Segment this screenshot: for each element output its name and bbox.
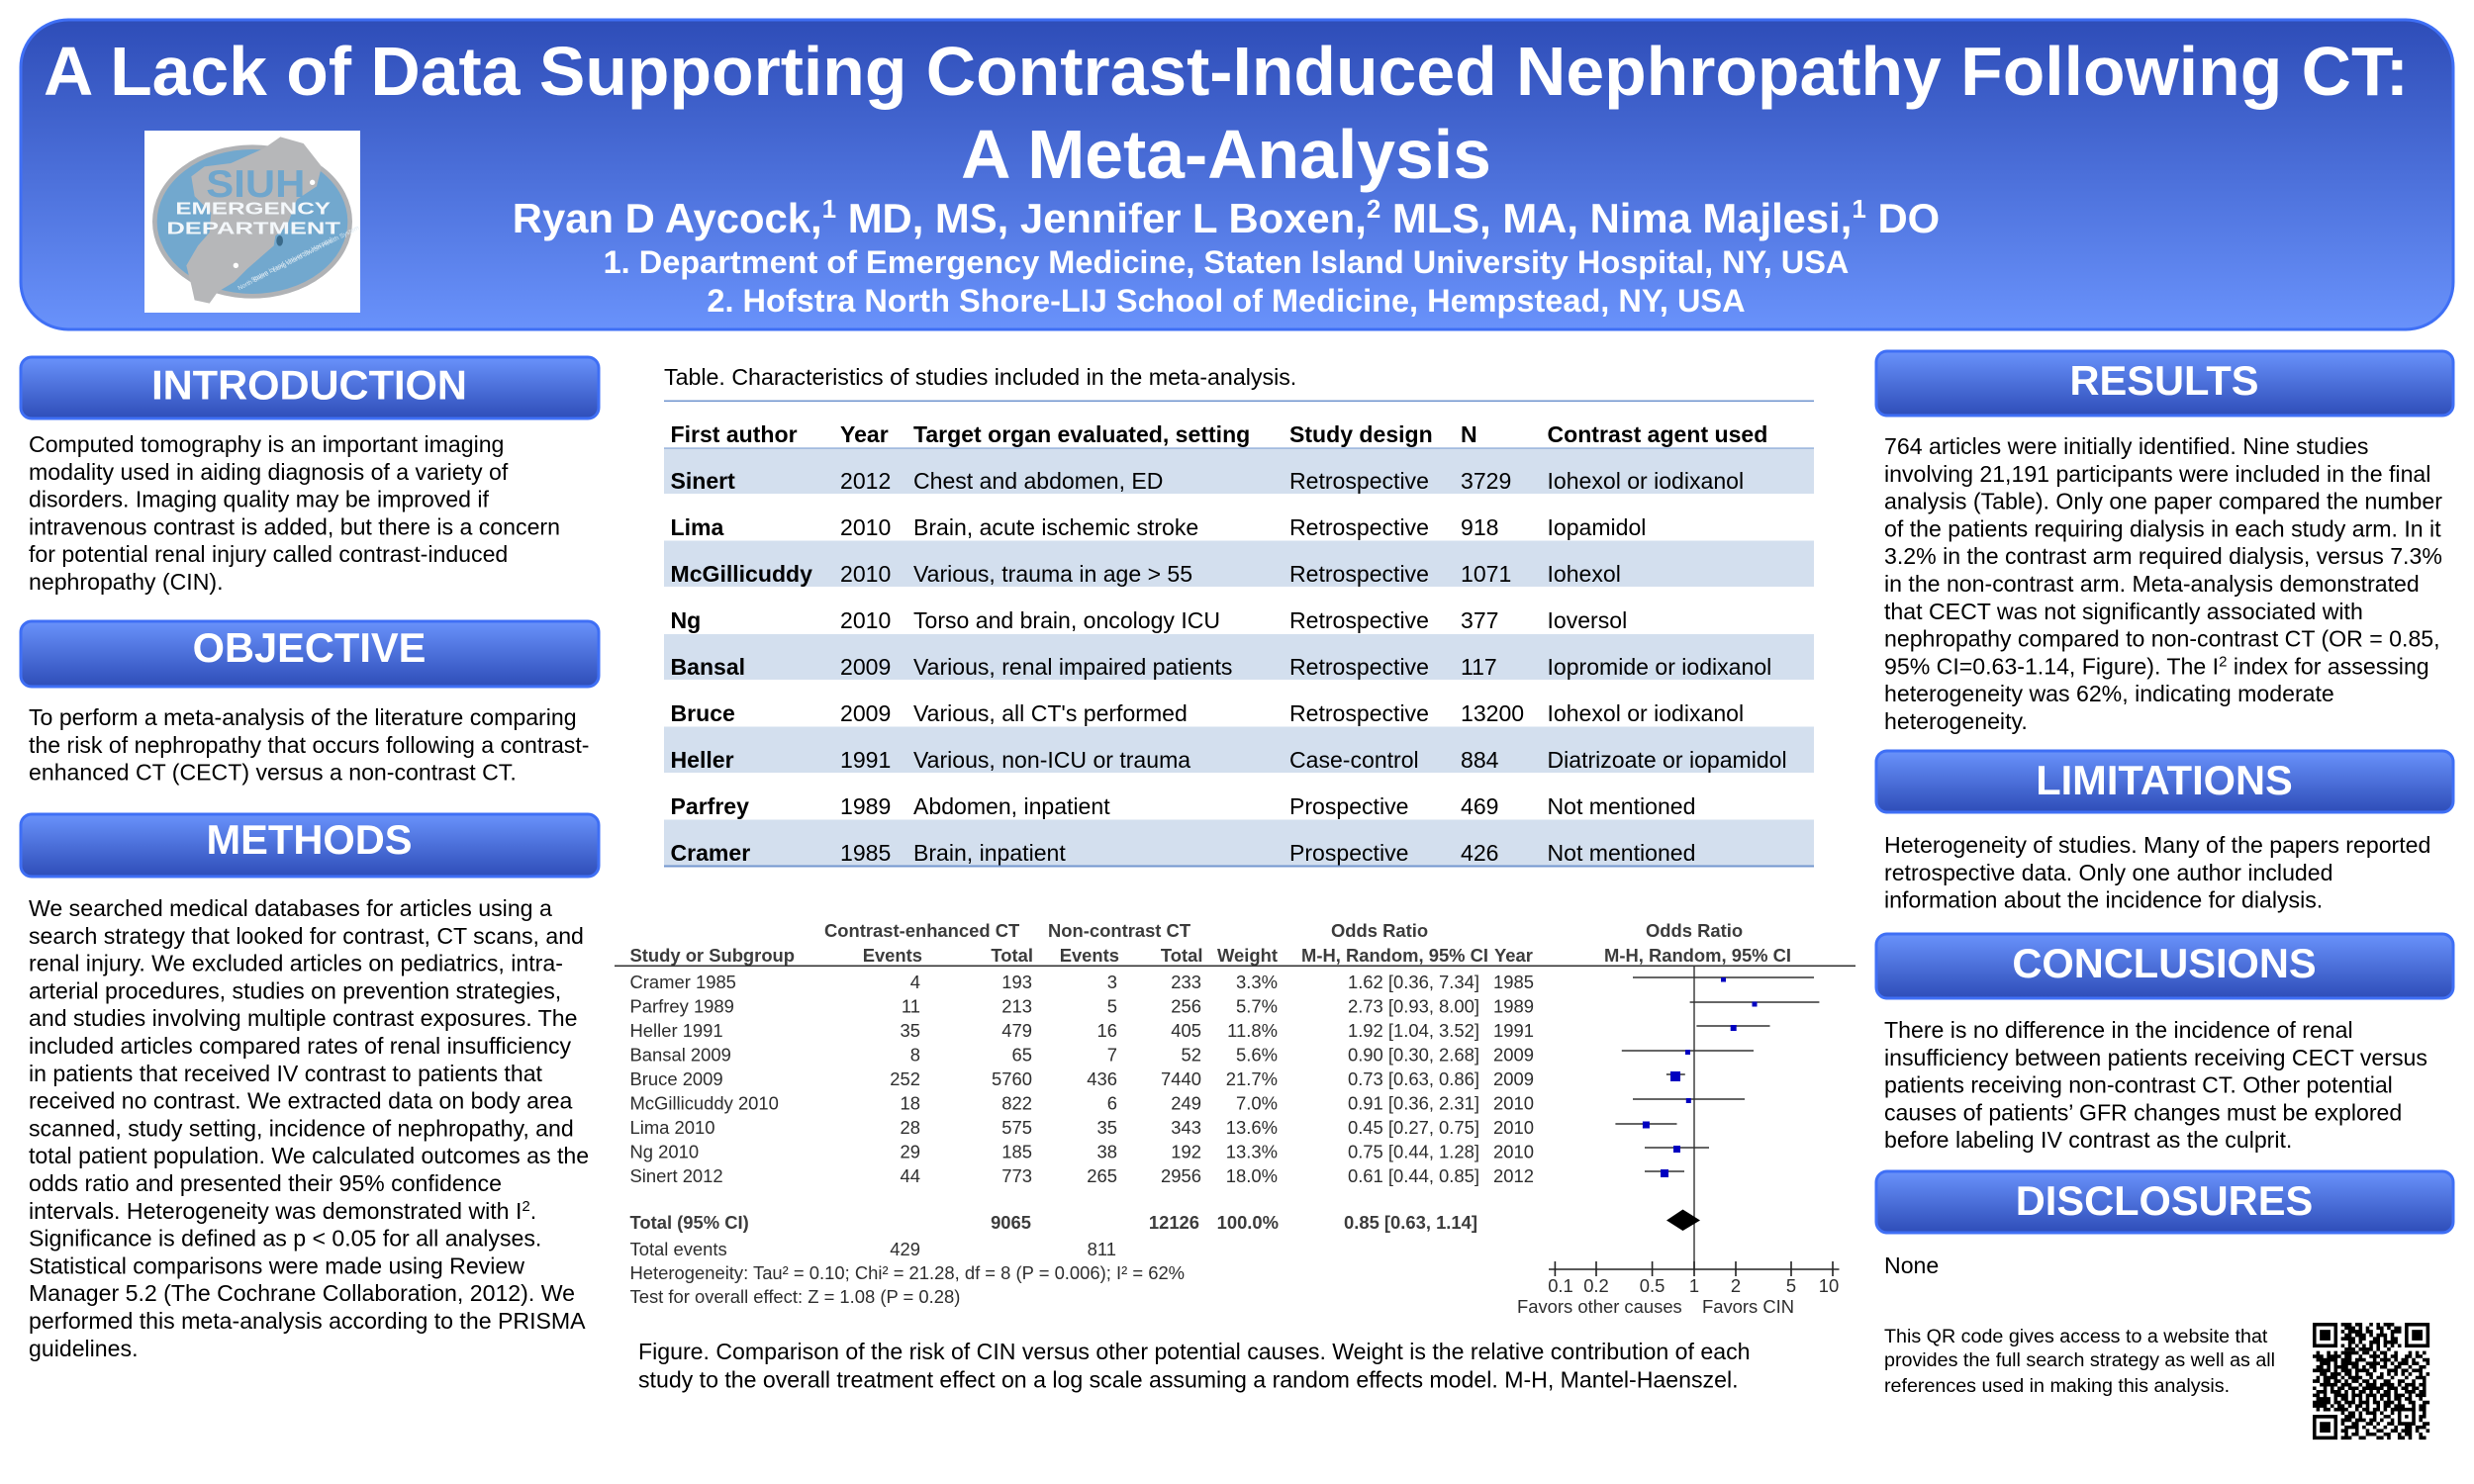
text: objective body: To perform a meta-analysis of the literature comparing — [29, 704, 577, 730]
text: results body: nephropathy compared to non-contrast CT (OR = 0.85, — [1884, 626, 2440, 652]
row: Parfrey: Abdomen, inpatient — [913, 793, 1110, 819]
row: Sinert: Chest and abdomen, ED — [913, 468, 1163, 494]
text: methods body: Manager 5.2 (The Cochrane Collaboration, 2012). We — [29, 1280, 575, 1306]
study rows: Parfrey 1989 — [629, 995, 734, 1017]
row: Heller: 884 — [1461, 747, 1499, 773]
logo: SIUH Emergency Department — [144, 131, 360, 313]
row: Ng: Ng — [671, 607, 701, 633]
text: methods body: intervals. Heterogeneity was demonstrated with I — [29, 1198, 522, 1224]
row: Parfrey: 469 — [1461, 793, 1498, 819]
row: Sinert: 3729 — [1461, 468, 1511, 494]
forest plot column headers: Events — [1060, 945, 1119, 966]
forest plot column headers: Events — [863, 945, 922, 966]
study rows: Ng 2010 — [629, 1142, 699, 1161]
forest plot column headers: Total — [991, 945, 1033, 966]
study rows: 192 — [1171, 1142, 1201, 1161]
panel: disclosures — [1876, 1171, 2453, 1438]
text: results body: index for assessing — [2227, 653, 2429, 679]
panel: conclusions — [1876, 934, 2453, 1153]
study rows: 265 — [1087, 1165, 1117, 1186]
study rows: 18.0% — [1226, 1165, 1278, 1186]
panel: results — [1876, 351, 2453, 734]
axis labels: 0.5 — [1640, 1275, 1665, 1296]
heading: disclosures: DISCLOSURES — [2016, 1177, 2313, 1224]
study rows: 0.45 [0.27, 0.75] — [1348, 1117, 1479, 1138]
text: QR code note: references used in making this analysis. — [1884, 1375, 2230, 1397]
study rows: 13.6% — [1226, 1117, 1278, 1138]
text: introduction body: intravenous contrast is added, but there is a concern — [29, 513, 560, 539]
text: results body: 764 articles were initially identified. Nine studies — [1884, 433, 2368, 459]
row: McGillicuddy: 2010 — [840, 561, 891, 587]
chart: forest plot — [1517, 966, 1839, 1317]
text: results body: 95% CI=0.63-1.14, Figure). The I — [1884, 653, 2219, 679]
text: introduction body: Computed tomography is an important imaging — [29, 431, 504, 457]
row: Lima: Brain, acute ischemic stroke — [913, 514, 1198, 540]
table header row: Year — [840, 421, 889, 447]
study rows — [629, 972, 1534, 1186]
study rows: Sinert 2012 — [629, 1165, 723, 1186]
forest plot column headers — [629, 920, 1791, 966]
text: methods body: odds ratio and presented their 95% confidence — [29, 1170, 502, 1196]
row: Ng: Ioversol — [1548, 607, 1627, 633]
row: Sinert: Iohexol or iodixanol — [1548, 468, 1744, 494]
statistics notes: Test for overall effect: Z = 1.08 (P = 0.28) — [629, 1286, 960, 1307]
text: conclusions body: There is no difference in the incidence of renal — [1884, 1017, 2353, 1043]
row: McGillicuddy: Retrospective — [1289, 561, 1429, 587]
axis labels: 1 — [1689, 1275, 1699, 1296]
study rows: 3.3% — [1236, 972, 1278, 992]
study rows: 13.3% — [1226, 1142, 1278, 1161]
study rows: 405 — [1171, 1020, 1201, 1041]
row: McGillicuddy: Various, trauma in age > 55 — [913, 561, 1192, 587]
study rows: 2009 — [1493, 1068, 1534, 1089]
forest plot column headers: M-H, Random, 95% CI — [1301, 945, 1488, 966]
study rows: 18 — [901, 1092, 920, 1114]
study rows: 2012 — [1493, 1165, 1534, 1186]
text: limitations body: retrospective data. Only one author included — [1884, 860, 2332, 885]
row: Bruce: Retrospective — [1289, 700, 1429, 726]
text: methods body: Statistical comparisons were made using Review — [29, 1252, 524, 1278]
row: Heller: Heller — [671, 747, 734, 773]
affiliations: 2. Hofstra North Shore-LIJ School of Medicine, Hempstead, NY, USA — [707, 283, 1746, 319]
study rows: Bruce 2009 — [629, 1068, 723, 1089]
forest plot column headers: Year — [1494, 945, 1533, 966]
text: results body: 3.2% in the contrast arm required dialysis, versus 7.3% — [1884, 543, 2442, 569]
totals row: 0.85 [0.63, 1.14] — [1344, 1212, 1477, 1233]
row: Heller: Case-control — [1289, 747, 1419, 773]
text: introduction body: for potential renal injury called contrast-induced — [29, 541, 508, 567]
title: A Lack of Data Supporting Contrast-Induced Nephropathy Following CT: — [44, 33, 2409, 110]
study rows: 773 — [1001, 1165, 1032, 1186]
study rows: 343 — [1171, 1117, 1201, 1138]
study rows: 52 — [1182, 1045, 1201, 1065]
statistics notes: Total events — [629, 1239, 727, 1259]
row: Ng — [671, 607, 1627, 633]
text: results body: of the patients requiring dialysis in each study arm. In it — [1884, 515, 2441, 541]
authors: Ryan D Aycock, — [513, 195, 822, 241]
study rows: 5 — [1107, 995, 1117, 1017]
row: Lima: 918 — [1461, 514, 1498, 540]
logo: SIUH Emergency Department: EMERGENCY — [175, 199, 331, 219]
panel: forest plot figure — [615, 920, 1856, 1393]
study rows: 2010 — [1493, 1092, 1534, 1114]
row: Bruce: Various, all CT's performed — [913, 700, 1188, 726]
study rows: 29 — [901, 1142, 920, 1161]
heading: methods — [21, 814, 599, 877]
row: Cramer: 1985 — [840, 840, 891, 866]
totals row: 100.0% — [1217, 1212, 1279, 1233]
text: objective body: the risk of nephropathy that occurs following a contrast- — [29, 732, 589, 758]
title: A Meta-Analysis — [961, 116, 1491, 193]
table caption: Table. Characteristics of studies included in the meta-analysis. — [664, 364, 1296, 390]
text: methods body: total patient population. We calculated outcomes as the — [29, 1143, 589, 1168]
statistics notes: Heterogeneity: Tau² = 0.10; Chi² = 21.28, df = 8 (P = 0.006); I² = 62% — [629, 1262, 1185, 1283]
confidence intervals — [1615, 977, 1819, 1171]
figure caption: Figure. Comparison of the risk of CIN versus other potential causes. Weight is the relative contribution of each — [638, 1339, 1750, 1364]
study rows: 213 — [1001, 995, 1032, 1017]
row: Sinert: Sinert — [671, 468, 735, 494]
statistics notes: 429 — [890, 1239, 920, 1259]
study rows: 256 — [1171, 995, 1201, 1017]
row: Lima: Retrospective — [1289, 514, 1429, 540]
axis — [1549, 1261, 1839, 1276]
heading: disclosures — [1876, 1171, 2453, 1233]
panel: study characteristics table — [664, 364, 1814, 867]
row: Sinert: Retrospective — [1289, 468, 1429, 494]
text: limitations body: Heterogeneity of studies. Many of the papers reported — [1884, 832, 2430, 858]
title — [44, 33, 2409, 193]
row: Bruce: 13200 — [1461, 700, 1524, 726]
study rows: 1.62 [0.36, 7.34] — [1348, 972, 1479, 992]
study rows: 1989 — [1493, 995, 1534, 1017]
favors labels: Favors other causes — [1517, 1296, 1682, 1317]
row: Heller: 1991 — [840, 747, 891, 773]
study rows: 28 — [901, 1117, 920, 1138]
text: conclusions body: insufficiency between patients receiving CECT versus — [1884, 1045, 2427, 1070]
row: Sinert: 2012 — [840, 468, 891, 494]
study rows: 44 — [901, 1165, 920, 1186]
heading: introduction — [21, 357, 599, 418]
forest plot column headers: Odds Ratio — [1331, 920, 1428, 941]
logo: SIUH Emergency Department: Staten Island University Hospital — [250, 236, 333, 284]
forest plot column headers: Odds Ratio — [1646, 920, 1743, 941]
text: results body: heterogeneity. — [1884, 708, 2028, 734]
icon: QR code — [2313, 1325, 2429, 1438]
text: methods body: . — [530, 1198, 536, 1224]
statistics notes: 811 — [1088, 1239, 1116, 1259]
study rows: 1991 — [1493, 1020, 1534, 1041]
study rows: 38 — [1097, 1142, 1117, 1161]
row: Bansal: 117 — [1461, 654, 1497, 680]
study rows: 5.7% — [1236, 995, 1278, 1017]
study rows: 35 — [1097, 1117, 1117, 1138]
study rows: 0.61 [0.44, 0.85] — [1348, 1165, 1479, 1186]
row: McGillicuddy: 1071 — [1461, 561, 1511, 587]
study rows: 7 — [1107, 1045, 1117, 1065]
row: Lima: Iopamidol — [1548, 514, 1646, 540]
study rows: Heller 1991 — [629, 1020, 723, 1041]
header banner — [21, 20, 2453, 329]
forest plot column headers: Weight — [1217, 945, 1278, 966]
authors: MD, MS, Jennifer L Boxen, — [836, 195, 1367, 241]
study rows: 2956 — [1161, 1165, 1201, 1186]
study rows: 0.73 [0.63, 0.86] — [1348, 1068, 1479, 1089]
study rows: 5.6% — [1236, 1045, 1278, 1065]
study effect markers — [1643, 977, 1758, 1177]
authors: 2 — [1367, 194, 1380, 224]
row: Cramer: 426 — [1461, 840, 1498, 866]
study rows: 16 — [1097, 1020, 1117, 1041]
row: McGillicuddy: Iohexol — [1548, 561, 1621, 587]
text: results body: analysis (Table). Only one paper compared the number — [1884, 489, 2442, 514]
text: results body: that CECT was not significantly associated with — [1884, 599, 2363, 624]
heading: results: RESULTS — [2069, 357, 2259, 404]
text: limitations body: information about the incidence for dialysis. — [1884, 887, 2323, 913]
text: methods body: search strategy that looked for contrast, CT scans, and — [29, 923, 584, 949]
study rows: 822 — [1001, 1092, 1032, 1114]
favors labels: Favors CIN — [1702, 1296, 1794, 1317]
logo: SIUH Emergency Department: DEPARTMENT — [166, 219, 340, 238]
row: Parfrey — [671, 793, 1695, 819]
heading: introduction: INTRODUCTION — [151, 362, 467, 408]
axis labels: 0.2 — [1583, 1275, 1609, 1296]
row: Bansal — [664, 634, 1814, 680]
row: Cramer: Brain, inpatient — [913, 840, 1066, 866]
row: Bansal: Bansal — [671, 654, 745, 680]
text: methods body: and studies involving multiple contrast exposures. The — [29, 1005, 578, 1031]
panel: methods — [21, 814, 599, 1361]
row: Bansal: 2009 — [840, 654, 891, 680]
study rows: 575 — [1001, 1117, 1032, 1138]
forest plot column headers: Non-contrast CT — [1048, 920, 1191, 941]
table header row: Contrast agent used — [1548, 421, 1767, 447]
row: Bansal: Retrospective — [1289, 654, 1429, 680]
text: introduction body: nephropathy (CIN). — [29, 569, 224, 595]
row: Parfrey: Prospective — [1289, 793, 1408, 819]
text: methods body: scanned, study setting, incidence of nephropathy, and — [29, 1115, 574, 1141]
authors: 1 — [822, 194, 836, 224]
axis labels: 5 — [1786, 1275, 1796, 1296]
study rows: 1.92 [1.04, 3.52] — [1348, 1020, 1479, 1041]
text: methods body: guidelines. — [29, 1336, 139, 1361]
affiliations: 1. Department of Emergency Medicine, Staten Island University Hospital, NY, USA — [604, 244, 1849, 280]
study rows: 436 — [1087, 1068, 1117, 1089]
row: Heller: Various, non-ICU or trauma — [913, 747, 1190, 773]
row: Parfrey: Parfrey — [671, 793, 749, 819]
heading: methods: METHODS — [207, 816, 412, 863]
study rows: 2010 — [1493, 1142, 1534, 1161]
totals row: 9065 — [991, 1212, 1031, 1233]
text: results body: in the non-contrast arm. Meta-analysis demonstrated — [1884, 571, 2420, 597]
row: Lima: 2010 — [840, 514, 891, 540]
heading: conclusions: CONCLUSIONS — [2012, 940, 2317, 986]
heading: limitations — [1876, 751, 2453, 812]
axis labels: 0.1 — [1548, 1275, 1573, 1296]
text: QR code note: provides the full search strategy as well as all — [1884, 1349, 2275, 1371]
study rows: 479 — [1001, 1020, 1032, 1041]
authors: MLS, MA, Nima Majlesi, — [1380, 195, 1852, 241]
axis labels — [1548, 1275, 1839, 1296]
text: methods body: received no contrast. We extracted data on body area — [29, 1088, 573, 1114]
figure caption: study to the overall treatment effect on a log scale assuming a random effects model. M-H, Mantel-Haenszel. — [638, 1367, 1739, 1393]
row: Parfrey: 1989 — [840, 793, 891, 819]
totals row: 12126 — [1149, 1212, 1199, 1233]
text: results body: 2 — [2219, 653, 2227, 670]
authors: 1 — [1852, 194, 1866, 224]
study rows: 11 — [902, 995, 920, 1017]
heading: results — [1876, 351, 2453, 416]
pooled effect diamond — [1666, 1209, 1700, 1231]
logo: SIUH Emergency Department: North Shore - Long Island Jewish Health System — [237, 225, 360, 292]
panel: introduction — [21, 357, 599, 595]
heading: objective — [21, 621, 599, 687]
axis labels: 10 — [1819, 1275, 1839, 1296]
study rows: 6 — [1107, 1092, 1117, 1114]
row: McGillicuddy: McGillicuddy — [671, 561, 812, 587]
text: methods body: performed this meta-analysis according to the PRISMA — [29, 1308, 586, 1334]
study rows: 0.90 [0.30, 2.68] — [1348, 1045, 1479, 1065]
table header row: Target organ evaluated, setting — [913, 421, 1250, 447]
study rows: 2009 — [1493, 1045, 1534, 1065]
text: conclusions body: before labeling IV contrast as the culprit. — [1884, 1127, 2292, 1153]
forest plot column headers: Contrast-enhanced CT — [824, 920, 1020, 941]
study rows: 185 — [1001, 1142, 1032, 1161]
row: Bruce: Bruce — [671, 700, 735, 726]
row: Bruce: Iohexol or iodixanol — [1548, 700, 1744, 726]
forest plot column headers: Total — [1161, 945, 1203, 966]
study rows: 8 — [910, 1045, 920, 1065]
text: conclusions body: patients receiving non-contrast CT. Other potential — [1884, 1072, 2393, 1098]
row: Sinert — [664, 449, 1814, 494]
row: Parfrey: Not mentioned — [1548, 793, 1695, 819]
row: Ng: 377 — [1461, 607, 1498, 633]
row: Bruce: 2009 — [840, 700, 891, 726]
panel: objective — [21, 621, 599, 786]
text: methods body: in patients that received IV contrast to patients that — [29, 1061, 543, 1086]
study rows: 11.8% — [1227, 1020, 1278, 1041]
study rows: 249 — [1171, 1092, 1201, 1114]
row: Lima — [671, 514, 1646, 540]
table header row: Study design — [1289, 421, 1433, 447]
table header row — [671, 421, 1767, 447]
statistics notes — [629, 1239, 1185, 1307]
row: Heller: Diatrizoate or iopamidol — [1548, 747, 1787, 773]
study rows: Lima 2010 — [629, 1117, 714, 1138]
text: methods body: renal injury. We excluded articles on pediatrics, intra- — [29, 951, 563, 976]
row: McGillicuddy — [664, 540, 1814, 587]
forest plot column headers: Study or Subgroup — [629, 945, 795, 966]
study rows: 0.91 [0.36, 2.31] — [1348, 1092, 1479, 1114]
text: methods body: 2 — [522, 1198, 530, 1215]
text: introduction body: modality used in aiding diagnosis of a variety of — [29, 459, 509, 485]
row: Ng: Retrospective — [1289, 607, 1429, 633]
row: Cramer: Prospective — [1289, 840, 1408, 866]
row: Ng: 2010 — [840, 607, 891, 633]
study rows: 7.0% — [1236, 1092, 1278, 1114]
study rows: 7440 — [1161, 1068, 1201, 1089]
heading: limitations: LIMITATIONS — [2036, 757, 2293, 803]
heading: conclusions — [1876, 934, 2453, 998]
text: objective body: enhanced CT (CECT) versus a non-contrast CT. — [29, 760, 517, 786]
study rows: 3 — [1107, 972, 1117, 992]
row: Cramer: Cramer — [671, 840, 750, 866]
table header row: First author — [671, 421, 798, 447]
study rows: 35 — [901, 1020, 920, 1041]
study rows: McGillicuddy 2010 — [629, 1092, 779, 1114]
affiliations — [604, 244, 1849, 319]
study rows: 233 — [1171, 972, 1201, 992]
text: QR code note: This QR code gives access to a website that — [1884, 1326, 2268, 1347]
study rows: Bansal 2009 — [629, 1045, 731, 1065]
heading: objective: OBJECTIVE — [193, 624, 426, 671]
text: methods body: included articles compared rates of renal insufficiency — [29, 1033, 572, 1059]
logo: SIUH Emergency Department: SIUH — [206, 163, 305, 206]
study rows: 2010 — [1493, 1117, 1534, 1138]
favors labels — [1517, 1296, 1794, 1317]
study rows: 193 — [1001, 972, 1032, 992]
study rows: 0.75 [0.44, 1.28] — [1348, 1142, 1479, 1161]
study rows: 1985 — [1493, 972, 1534, 992]
text: methods body: We searched medical databases for articles using a — [29, 895, 552, 921]
text: methods body: Significance is defined as p < 0.05 for all analyses. — [29, 1226, 541, 1252]
study rows: 2.73 [0.93, 8.00] — [1348, 995, 1479, 1017]
study rows: 21.7% — [1226, 1068, 1278, 1089]
text: disclosures body: None — [1884, 1252, 1939, 1278]
table header row: N — [1461, 421, 1477, 447]
totals row — [629, 1212, 1477, 1233]
text: methods body: arterial procedures, studies on prevention strategies, — [29, 977, 561, 1003]
study rows: 252 — [890, 1068, 920, 1089]
totals row: Total (95% CI) — [629, 1212, 749, 1233]
row: Lima: Lima — [671, 514, 723, 540]
text: results body: involving 21,191 participants were included in the final — [1884, 461, 2430, 487]
authors: DO — [1866, 195, 1940, 241]
row: Bansal: Various, renal impaired patients — [913, 654, 1232, 680]
row: Bruce — [671, 700, 1744, 726]
study rows: Cramer 1985 — [629, 972, 736, 992]
forest plot column headers: M-H, Random, 95% CI — [1604, 945, 1791, 966]
study rows: 4 — [910, 972, 920, 992]
text: introduction body: disorders. Imaging quality may be improved if — [29, 487, 490, 512]
row: Cramer — [664, 819, 1814, 866]
row: Ng: Torso and brain, oncology ICU — [913, 607, 1220, 633]
study rows: 65 — [1012, 1045, 1032, 1065]
panel: limitations — [1876, 751, 2453, 913]
axis labels: 2 — [1731, 1275, 1741, 1296]
row: Cramer: Not mentioned — [1548, 840, 1695, 866]
row: Heller — [664, 726, 1814, 773]
row: Bansal: Iopromide or iodixanol — [1548, 654, 1771, 680]
text: conclusions body: causes of patients’ GFR changes must be explored — [1884, 1099, 2402, 1125]
text: results body: heterogeneity was 62%, indicating moderate — [1884, 681, 2334, 706]
study rows: 5760 — [992, 1068, 1032, 1089]
